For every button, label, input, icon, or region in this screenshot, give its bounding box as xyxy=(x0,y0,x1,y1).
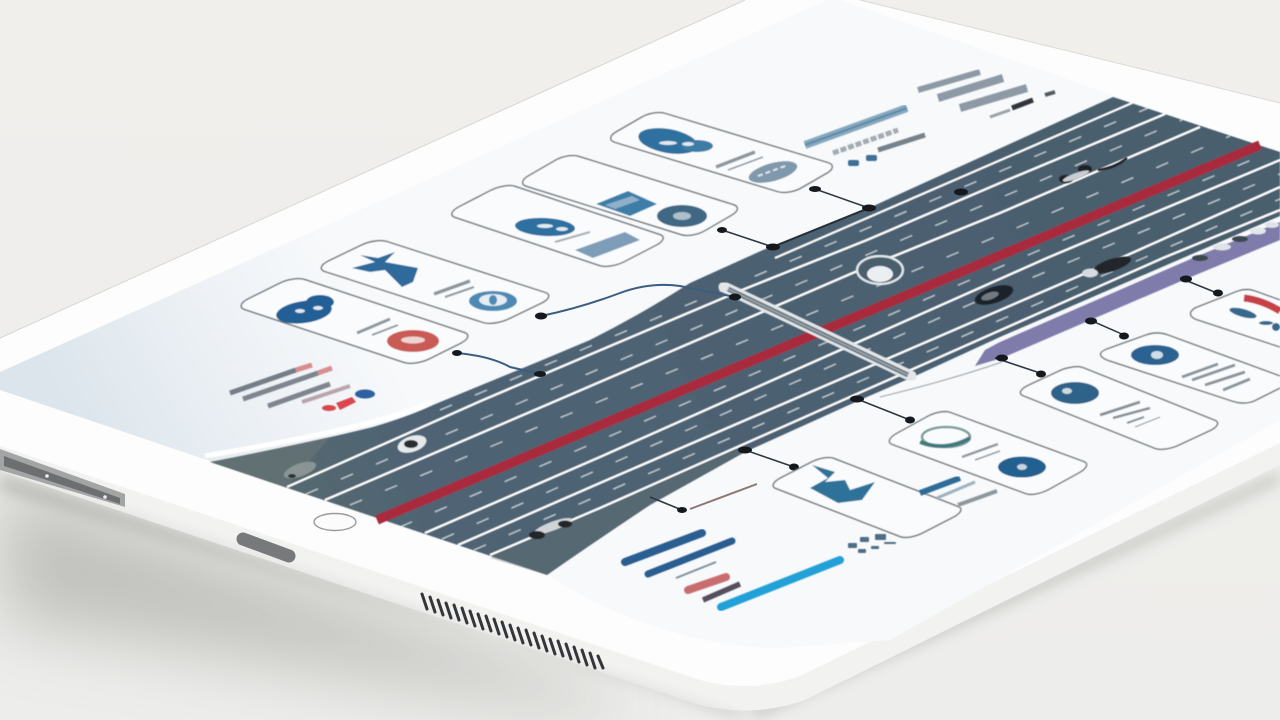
home button xyxy=(314,514,356,530)
title bar xyxy=(805,108,925,166)
panel: card 5 xyxy=(234,276,475,366)
text block xyxy=(1182,364,1250,390)
text block xyxy=(555,232,590,242)
car right xyxy=(1082,253,1133,278)
text block xyxy=(434,281,474,297)
icon: dark circle badge xyxy=(998,456,1046,478)
panel: right card 1 xyxy=(1014,364,1224,452)
roundabout emblem xyxy=(857,256,903,284)
icon: blue ring badge xyxy=(469,291,517,311)
panel: upper card 2 xyxy=(516,153,744,238)
icon: blue road glyph xyxy=(596,191,657,216)
red bar xyxy=(1244,298,1280,311)
caption lines xyxy=(676,562,716,578)
car bottom xyxy=(529,515,573,539)
grey vehicle far left xyxy=(282,458,318,482)
panel: lower card 2 xyxy=(883,409,1093,497)
small icon cluster xyxy=(848,534,896,553)
icon: red circle badge xyxy=(387,330,439,352)
text and bars: beside lower card 1 xyxy=(920,478,997,505)
vehicle queue at the right edge xyxy=(1192,222,1279,261)
charging port xyxy=(243,539,289,556)
text block xyxy=(962,444,1000,460)
grey left road end xyxy=(210,437,330,487)
blue sub bar xyxy=(648,541,732,574)
bar group: lower left of screen xyxy=(625,533,896,607)
icon: blue circle badge xyxy=(1131,345,1179,365)
road surface xyxy=(210,97,1280,575)
car top right xyxy=(1059,158,1127,184)
panel: lower card 1 xyxy=(767,455,967,540)
lane dashes xyxy=(306,108,1280,550)
icon: dark circle badge xyxy=(657,205,707,227)
grey curve beside bridge xyxy=(880,362,1002,397)
white lane lines xyxy=(287,103,1280,555)
side volume buttons xyxy=(0,449,125,507)
text block xyxy=(1100,402,1160,427)
icon: blue car glyph xyxy=(275,295,334,327)
connector dots xyxy=(452,186,1223,513)
icon: blue plane-shaped glyph xyxy=(352,252,418,287)
cyan bar xyxy=(721,560,840,607)
car bottom left xyxy=(395,432,429,456)
text block xyxy=(357,319,398,335)
panel: right card 3 xyxy=(1190,290,1280,347)
icon: teal vehicle glyph xyxy=(810,465,875,503)
tablet cast shadow xyxy=(0,472,1280,716)
red central lane xyxy=(377,145,1260,520)
speaker grille xyxy=(422,594,603,668)
panel: upper card 1 xyxy=(604,110,839,195)
blue marks xyxy=(1228,306,1280,331)
legend: lower left xyxy=(230,365,375,411)
connector lines xyxy=(457,189,1217,510)
text block: upper right xyxy=(918,72,1055,117)
blue heading bar xyxy=(625,533,702,562)
panel: right card 2 xyxy=(1100,333,1280,403)
icon: hatched glyph xyxy=(575,232,640,258)
purple side strip xyxy=(975,222,1280,366)
icon: blue blob badge xyxy=(1051,382,1099,404)
curved white road shoulder xyxy=(205,401,433,456)
grey lower road margin xyxy=(490,446,745,575)
car center right xyxy=(973,281,1015,309)
icon: ring glyph xyxy=(920,427,970,447)
dark bar xyxy=(703,584,740,600)
red bar xyxy=(688,577,726,590)
text block xyxy=(716,152,763,170)
icon: grey-blue glyph xyxy=(747,157,799,187)
vehicles on road xyxy=(282,158,1279,539)
overpass bridge xyxy=(724,287,911,376)
icon: blue glyph xyxy=(515,216,575,238)
highway xyxy=(205,97,1280,575)
panel: upper card 3 xyxy=(445,183,670,269)
panel: card 4 xyxy=(314,238,556,326)
icon: blue vehicle glyph xyxy=(636,124,713,158)
